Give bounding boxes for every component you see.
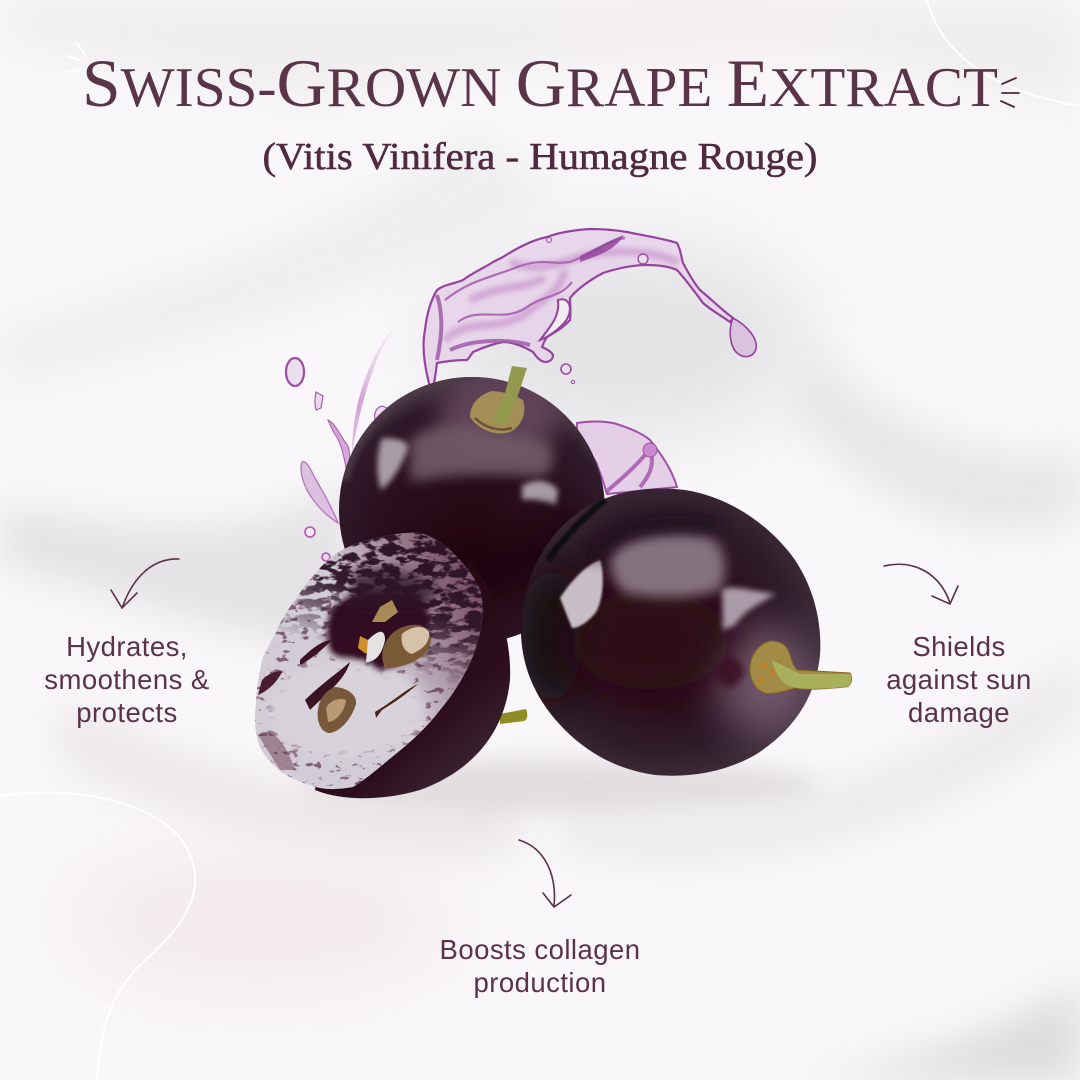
decorative white curve: top right: [927, 0, 1080, 106]
illustration: top grape: [339, 366, 605, 643]
arrow: right: [884, 564, 958, 604]
icon: title sparkle left: [66, 43, 85, 72]
subtitle: (Vitis Vinifera - Humagne Rouge): [262, 136, 818, 178]
arrow: left: [111, 559, 179, 608]
icon: title sparkle right: [1001, 78, 1019, 107]
text: hydrates: smoothens &: [44, 664, 210, 695]
arrow: bottom: [519, 840, 571, 907]
text: hydrates: protects: [76, 697, 178, 728]
text: sun protection: Shields: [912, 631, 1006, 662]
text: hydrates: Hydrates,: [66, 631, 188, 662]
text: sun protection: damage: [908, 697, 1010, 728]
text: collagen: production: [474, 967, 606, 998]
illustration: halved grape: [255, 532, 510, 798]
text: sun protection: against sun: [886, 664, 1032, 695]
text: collagen: Boosts collagen: [440, 934, 640, 965]
illustration: right grape: [521, 489, 852, 776]
illustration: soft shadow: [300, 759, 820, 811]
illustration: grape juice splash: [286, 229, 756, 561]
title: SWISS-GROWN GRAPE EXTRACT: [82, 45, 998, 121]
illustration: back stem: [500, 709, 527, 724]
decorative white curve: bottom left: [0, 793, 195, 1080]
